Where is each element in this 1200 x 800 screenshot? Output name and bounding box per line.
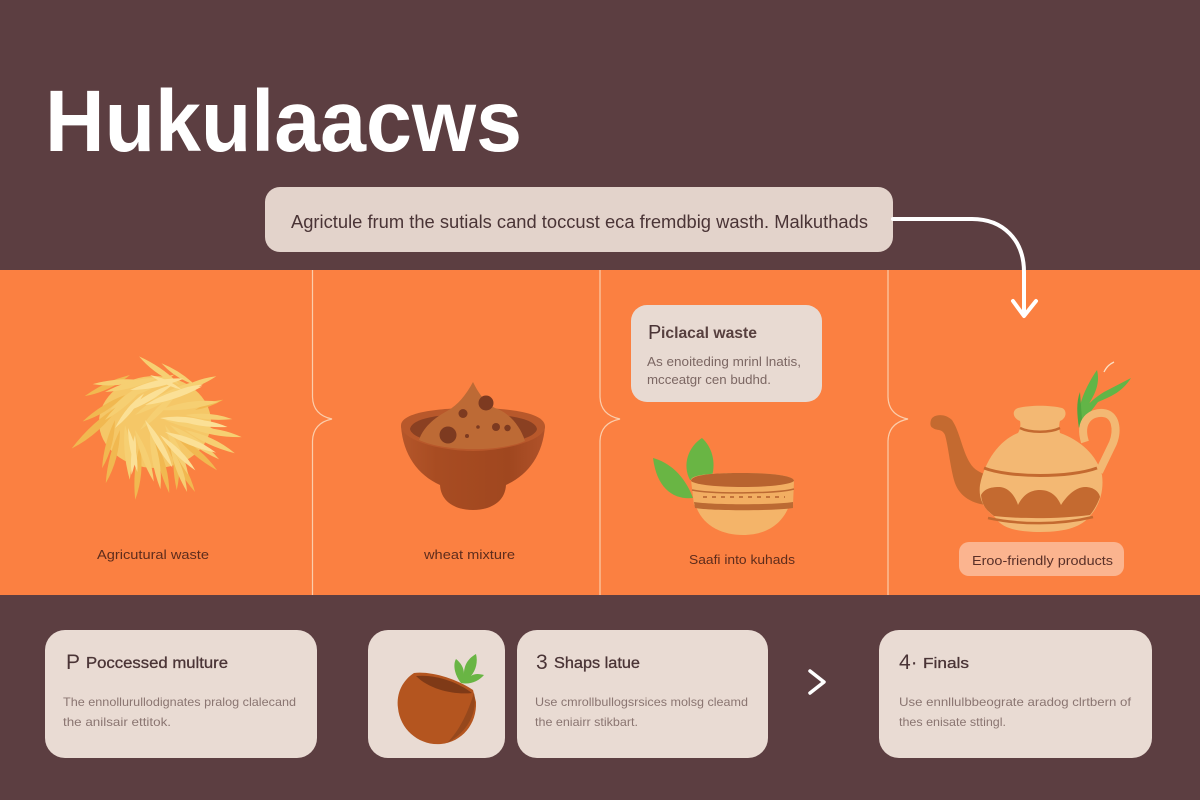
card: shaps latue: Shaps latue	[554, 655, 640, 672]
card: pical waste: P	[648, 322, 661, 344]
icon: tilted clay pot with leaves	[398, 654, 484, 744]
card: shaps latue: the eniairr stikbart.	[535, 715, 638, 729]
callout: introduction	[265, 187, 893, 252]
card: processed mixture: P	[66, 651, 80, 674]
card: processed mixture: The ennollurullodignates pralog clalecand	[63, 695, 296, 709]
icon: bowl of wheat mixture	[401, 382, 545, 510]
card: finals: 4·	[899, 651, 918, 674]
card: shaps latue: 3	[536, 651, 548, 674]
card: icon kulhad pot	[368, 630, 505, 758]
callout: introduction: Agrictule frum the sutials cand toccust eca fremdbig wasth. Malkuthads	[291, 212, 868, 232]
arrow: callout to final product	[893, 219, 1036, 316]
card: pical waste: iclacal waste	[661, 325, 757, 342]
icon: clay teapot with sprig	[930, 362, 1131, 532]
card: finals: Finals	[923, 655, 969, 672]
label: agricultural waste: Agricutural waste	[97, 547, 209, 562]
card: pical waste: mcceatgr cen budhd.	[647, 373, 771, 387]
card: processed mixture: Poccessed multure	[86, 655, 228, 672]
icon: kulhad with leaves	[653, 438, 794, 535]
card: pical waste	[631, 305, 822, 402]
label: eco-friendly products pill: Eroo-friendly products	[972, 553, 1114, 568]
card: shaps latue: Use cmrollbullogsrsices molsg cleamd	[535, 695, 748, 709]
label: shaped into kulhads: Saafi into kuhads	[689, 552, 796, 567]
title: Hukulaacws	[45, 73, 522, 170]
panel: process band	[0, 270, 1200, 595]
card: finals: Use ennllulbbeograte aradog clrtbern of	[899, 695, 1132, 709]
card: finals	[879, 630, 1152, 758]
icon: agricultural waste straw	[70, 354, 242, 500]
card: pical waste: As enoiteding mrinl lnatis,	[647, 355, 801, 369]
label: eco-friendly products pill	[959, 542, 1124, 576]
card: shaps latue	[517, 630, 768, 758]
card: processed mixture: the anilsair ettitok.	[63, 715, 171, 729]
arrow: chevron to final step	[810, 671, 824, 693]
card: finals: thes enisate sttingl.	[899, 715, 1006, 729]
label: wheat mixture: wheat mixture	[423, 547, 515, 562]
card: processed mixture	[45, 630, 317, 758]
